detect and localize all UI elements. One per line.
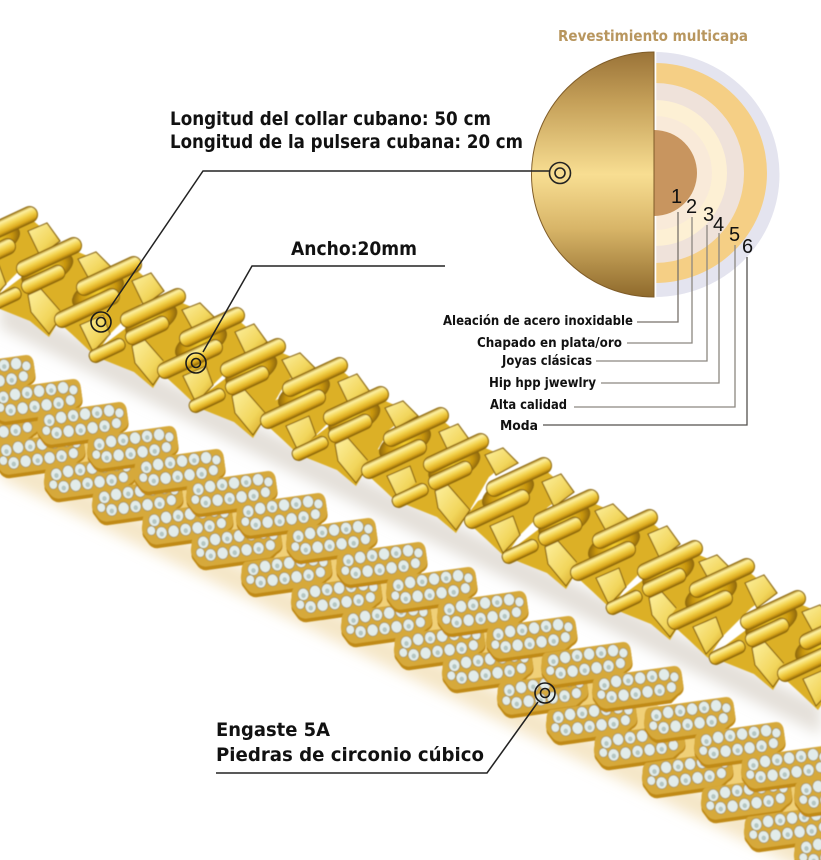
target marker on sphere xyxy=(550,162,570,184)
layer numbers: 2 xyxy=(686,196,697,218)
layer labels: Chapado en plata/oro xyxy=(477,336,622,351)
callout: stone setting: Engaste 5A xyxy=(216,719,330,741)
callout: stone setting xyxy=(216,683,555,773)
layer labels: Hip hpp jwewlry xyxy=(489,376,596,391)
layer numbers: 3 xyxy=(703,204,714,226)
layer numbers: 5 xyxy=(729,224,740,246)
layer numbers xyxy=(671,186,753,258)
callout: stone setting: Piedras de circonio cúbico xyxy=(216,744,484,766)
layer labels: Moda xyxy=(500,419,538,434)
layer labels: Alta calidad xyxy=(490,398,567,413)
right half: plating rings xyxy=(654,52,780,297)
gold cuban chain xyxy=(0,204,821,710)
callout: width: Ancho:20mm xyxy=(291,238,417,260)
layer numbers: 4 xyxy=(713,214,724,236)
diagram: multilayer coating cross-section xyxy=(532,52,780,297)
callout: width xyxy=(186,238,445,373)
shadows under chains xyxy=(0,298,821,860)
layer numbers: 6 xyxy=(742,236,753,258)
callout: length: Longitud del collar cubano: 50 cm xyxy=(170,108,491,130)
callout: length xyxy=(91,108,550,332)
left half: gold sphere xyxy=(532,52,654,297)
layer leader lines xyxy=(543,212,747,425)
callout: length: Longitud de la pulsera cubana: 20 cm xyxy=(170,131,523,153)
layer numbers: 1 xyxy=(671,186,682,208)
layer labels: Joyas clásicas xyxy=(501,354,592,369)
layer labels xyxy=(443,314,633,434)
iced diamond chain xyxy=(0,354,821,860)
heading: multilayer coating: Revestimiento multicapa xyxy=(558,27,748,45)
layer labels: Aleación de acero inoxidable xyxy=(443,314,633,329)
